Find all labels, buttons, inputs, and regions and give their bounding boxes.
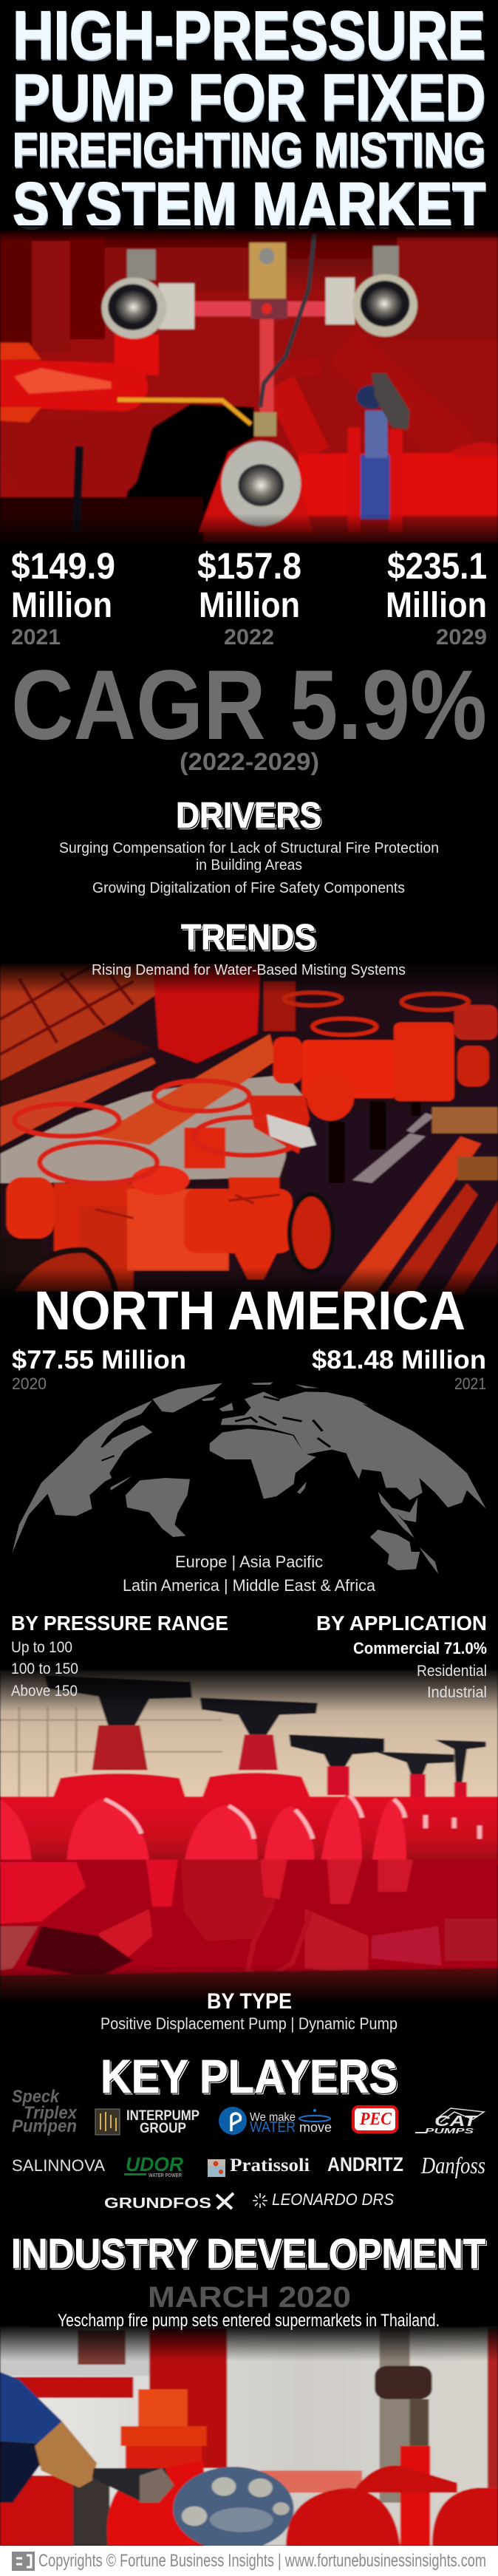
stat 2021: 2021 bbox=[11, 625, 61, 650]
drivers text: in Building Areas bbox=[196, 857, 302, 873]
photo: red gate valves bbox=[0, 961, 498, 1308]
photo: red pipes and hose valves bbox=[0, 225, 498, 551]
logo: Grundfos bbox=[104, 2193, 233, 2212]
logo: Speck Triplex Pumpen: Speck bbox=[12, 2087, 60, 2107]
trends heading: TRENDS bbox=[181, 918, 316, 958]
logo: Speck Triplex Pumpen: Triplex bbox=[24, 2103, 78, 2123]
drivers text: Surging Compensation for Lack of Structural Fire Protection bbox=[59, 840, 439, 856]
market size stats bbox=[11, 545, 487, 650]
logo: Pratissoli: Pratissoli bbox=[230, 2156, 310, 2175]
logo: Grundfos: GRUNDFOS bbox=[104, 2195, 211, 2212]
by pressure range: 100 to 150 bbox=[11, 1660, 78, 1677]
key players heading: KEY PLAYERS bbox=[100, 2050, 398, 2103]
logo: Interpump Group bbox=[95, 2108, 199, 2136]
drivers text: Growing Digitalization of Fire Safety Components bbox=[92, 880, 405, 896]
by pressure range: Up to 100 bbox=[11, 1639, 72, 1656]
region heading: NORTH AMERICA bbox=[34, 1280, 465, 1341]
by type bbox=[100, 1989, 398, 2033]
footer bbox=[0, 2546, 498, 2576]
by pressure range: BY PRESSURE RANGE bbox=[11, 1612, 228, 1635]
trends text: Rising Demand for Water-Based Misting Systems bbox=[92, 962, 406, 978]
stat 2029: Million bbox=[386, 586, 487, 625]
by type: BY TYPE bbox=[207, 1989, 292, 2014]
stat 2022: 2022 bbox=[224, 625, 274, 650]
stat 2021 bbox=[11, 545, 115, 650]
stat 2022: $157.8 bbox=[197, 545, 301, 587]
photo: red hydrant valves bbox=[0, 1666, 498, 2014]
other regions: Latin America | Middle East & Africa bbox=[123, 1576, 376, 1595]
drivers text bbox=[59, 840, 439, 896]
by application: BY APPLICATION bbox=[316, 1612, 487, 1635]
region value 2020: 2020 bbox=[12, 1374, 47, 1393]
photo: worker tightening red valve bbox=[0, 2324, 498, 2551]
logo: Cat Pumps: PUMPS bbox=[425, 2127, 474, 2136]
other regions: Europe | Asia Pacific bbox=[175, 1553, 323, 1571]
by application bbox=[316, 1612, 487, 1701]
logo: Udor: UDOR bbox=[126, 2153, 183, 2175]
logo: Speck Triplex Pumpen bbox=[12, 2087, 78, 2136]
logo: Cat Pumps bbox=[415, 2108, 484, 2136]
stat 2029 bbox=[386, 545, 487, 650]
by pressure range bbox=[11, 1612, 228, 1700]
by application: Industrial bbox=[427, 1684, 487, 1701]
logo: Cat Pumps: CAT bbox=[434, 2113, 479, 2130]
by application: Commercial 71.0% bbox=[353, 1639, 487, 1657]
world globe map bbox=[12, 1383, 486, 1574]
stat 2029: 2029 bbox=[436, 625, 487, 650]
logo: We make water move bbox=[219, 2107, 332, 2136]
logo: Danfoss: Danfoss bbox=[420, 2152, 485, 2178]
icon: Fortune Business Insights logo bbox=[12, 2552, 35, 2571]
by application: Residential bbox=[417, 1663, 487, 1680]
logo: Pratissoli bbox=[208, 2156, 310, 2177]
logo: Andritz: ANDRITZ bbox=[327, 2153, 403, 2175]
stat 2022 bbox=[197, 545, 301, 650]
logo: Speck Triplex Pumpen: Pumpen bbox=[12, 2116, 77, 2136]
other regions bbox=[123, 1553, 376, 1595]
logo: We make water move: WATER bbox=[250, 2119, 296, 2136]
stat 2022: Million bbox=[199, 586, 300, 625]
development date: MARCH 2020 bbox=[148, 2281, 351, 2314]
region value 2020 bbox=[12, 1346, 186, 1393]
logo: We make water move: move bbox=[299, 2120, 332, 2135]
region value 2020: $77.55 Million bbox=[12, 1346, 186, 1374]
logo: Interpump Group: INTERPUMP bbox=[126, 2108, 199, 2124]
logo: PEC bbox=[353, 2107, 397, 2132]
region value 2021 bbox=[312, 1346, 486, 1393]
logo: Leonardo DRS: LEONARDO DRS bbox=[272, 2190, 394, 2209]
by pressure range: Above 150 bbox=[11, 1683, 78, 1700]
logo: Udor: WATER POWER bbox=[149, 2173, 182, 2178]
drivers heading: DRIVERS bbox=[176, 796, 321, 836]
logo: We make water move: We make bbox=[250, 2111, 296, 2124]
title bbox=[13, 0, 485, 241]
CAGR period: (2022-2029) bbox=[180, 748, 319, 775]
stat 2021: Million bbox=[11, 586, 112, 625]
logo: Salinnova: SALINNOVA bbox=[12, 2156, 105, 2175]
logo: Interpump Group: GROUP bbox=[140, 2121, 186, 2136]
stat 2029: $235.1 bbox=[387, 545, 487, 587]
logo: PEC: PEC bbox=[359, 2110, 392, 2129]
region value 2021: $81.48 Million bbox=[312, 1346, 486, 1374]
stat 2021: $149.9 bbox=[11, 545, 115, 587]
by type: Positive Displacement Pump | Dynamic Pump bbox=[100, 2014, 398, 2033]
region value 2021: 2021 bbox=[454, 1374, 486, 1393]
